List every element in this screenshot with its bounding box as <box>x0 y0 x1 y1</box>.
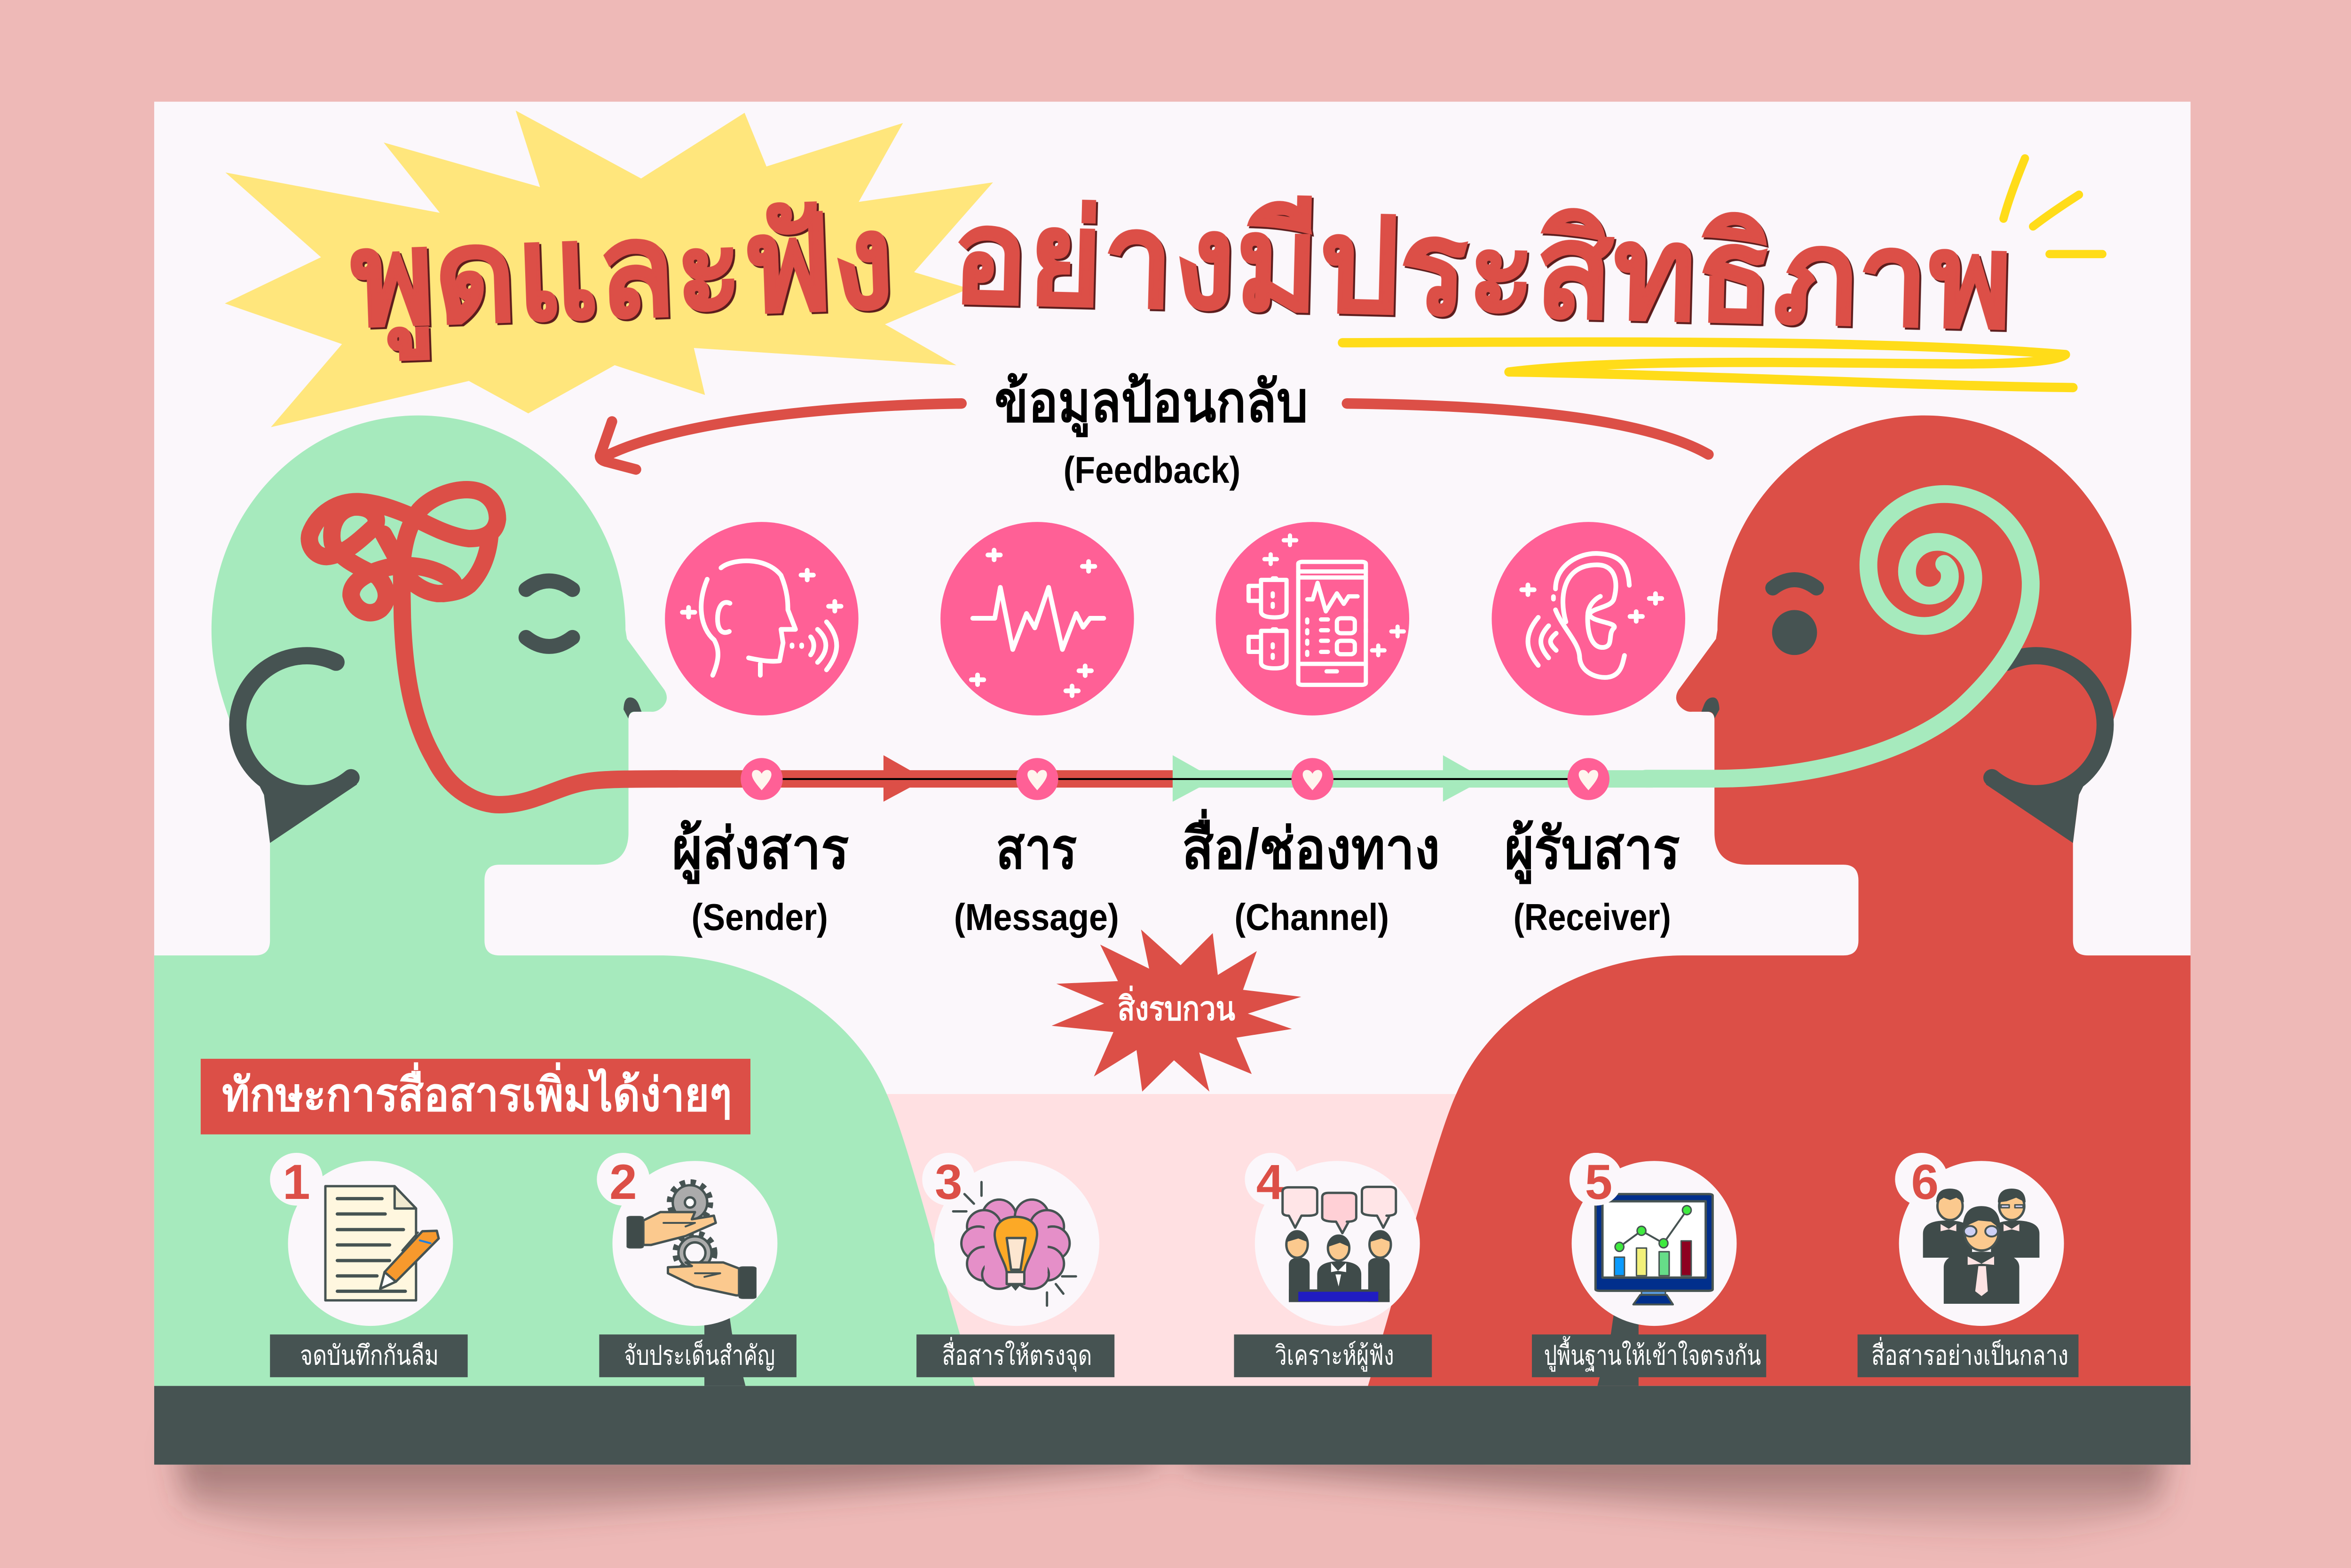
callout: noise burst: สิ่งรบกวน <box>1118 985 1235 1027</box>
icon: monitor with chart <box>1595 1194 1712 1304</box>
icon: hands with gears <box>670 1182 714 1272</box>
bottom bar <box>154 1386 2191 1465</box>
label: take notes <box>270 1334 468 1377</box>
label: receiver English: (Receiver) <box>1514 896 1671 938</box>
heading: feedback English: (Feedback) <box>1064 449 1240 491</box>
skill 2: catch the key point: 2 <box>609 1155 637 1210</box>
icon: brain and light bulb <box>953 1182 1076 1306</box>
skill 4: analyse the audience: วิเคราะห์ผู้ฟัง <box>1275 1340 1394 1371</box>
skill 6: communicate neutrally: 6 <box>1911 1155 1939 1210</box>
poster panel <box>154 102 2191 1465</box>
skill 1: take notes: 1 <box>283 1155 310 1210</box>
poster shadow <box>177 1440 2166 1542</box>
label: catch the key point <box>599 1334 797 1377</box>
heading: feedback Thai: ข้อมูลป้อนกลับ <box>994 370 1308 437</box>
label: channel English: (Channel) <box>1234 896 1389 938</box>
skill 3: communicate to the point: สื่อสารให้ตรงจุด <box>942 1337 1092 1372</box>
pink lower band <box>840 1094 1500 1387</box>
label: message English: (Message) <box>954 896 1119 938</box>
skill 1: take notes <box>270 1153 468 1377</box>
skill 5: build common understanding: ปูพื้นฐานให้เข้าใจตรงกัน <box>1544 1336 1761 1371</box>
skill 6: communicate neutrally: สื่อสารอย่างเป็นกลาง <box>1871 1337 2068 1371</box>
label: communicate neutrally <box>1858 1334 2078 1377</box>
skill 5: build common understanding <box>1532 1153 1766 1377</box>
flow line and message nodes <box>741 758 1609 800</box>
label: receiver Thai: ผู้รับสาร <box>1505 817 1680 884</box>
yellow spark marks <box>2004 158 2102 254</box>
skill 4: analyse the audience: 4 <box>1256 1155 1284 1210</box>
yellow underline scribble <box>1342 342 2073 387</box>
panel: starburst behind title <box>225 110 993 427</box>
icon: channel phone and devices <box>1216 522 1409 716</box>
skill 2: catch the key point <box>597 1153 797 1377</box>
figure: red receiver head <box>1368 416 2193 1386</box>
skill 4: analyse the audience <box>1234 1153 1432 1377</box>
label: sender English: (Sender) <box>692 896 828 938</box>
label: build common understanding <box>1532 1334 1766 1377</box>
skill 5: build common understanding: 5 <box>1585 1155 1612 1210</box>
icon: message pulse <box>940 522 1134 716</box>
label: message Thai: สาร <box>996 817 1077 881</box>
label: channel Thai: สื่อ/ช่องทาง <box>1182 809 1440 881</box>
skill 3: communicate to the point <box>916 1153 1114 1377</box>
skill 3: communicate to the point: 3 <box>935 1155 962 1210</box>
tangled red thought thread <box>309 490 678 805</box>
arrow: feedback left <box>600 403 962 470</box>
title: second part: อย่างมีประสิทธิภาพ <box>950 182 2014 355</box>
icon: audience with speech bubbles <box>1283 1187 1396 1302</box>
heading: skills banner: ทักษะการสื่อสารเพิ่มได้ง่ายๆ <box>222 1062 732 1120</box>
skill 2: catch the key point: จับประเด็นสำคัญ <box>624 1339 775 1371</box>
heading: skills banner <box>201 1059 750 1135</box>
skill 6: communicate neutrally <box>1858 1153 2078 1377</box>
flow band: green receiver half and spiral thought <box>1173 494 2031 802</box>
label: communicate to the point <box>916 1334 1114 1377</box>
callout: noise burst <box>1052 930 1301 1092</box>
skill 1: take notes: จดบันทึกกันลืม <box>300 1340 439 1371</box>
label: analyse the audience <box>1234 1334 1432 1377</box>
icon: three people with glasses <box>1923 1189 2039 1304</box>
title: first part: พูดและฟัง <box>348 188 897 362</box>
arrow: feedback right segment <box>1347 403 1708 455</box>
label: sender Thai: ผู้ส่งสาร <box>672 817 849 884</box>
icon: receiver ear <box>1492 522 1685 716</box>
figure: green sender head <box>150 416 975 1386</box>
flow band: red sender half <box>660 755 1173 802</box>
icon: sender speaking head <box>665 522 859 716</box>
icon: paper and pencil <box>325 1186 439 1300</box>
